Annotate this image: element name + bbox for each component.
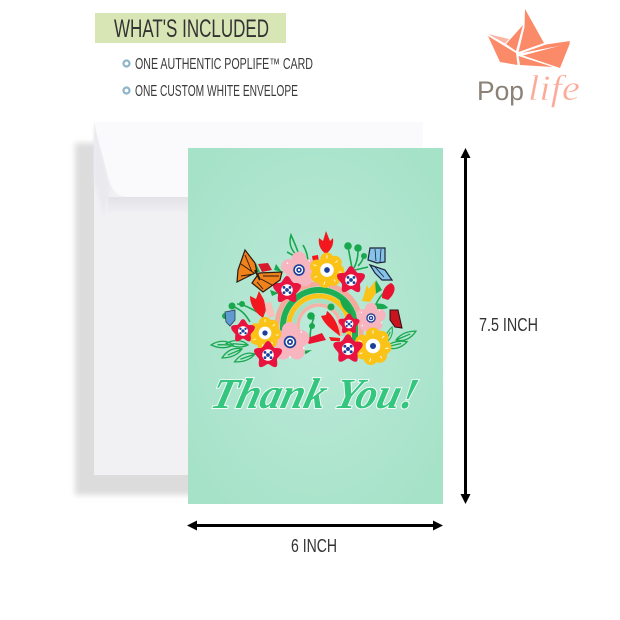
heading: what's included: WHAT'S INCLUDED	[114, 15, 269, 43]
logo wordmark: life: life	[528, 68, 580, 108]
logo: poplife	[477, 9, 580, 108]
list item: card: ONE AUTHENTIC POPLIFE™ CARD	[135, 56, 313, 73]
panel: heading banner	[95, 13, 286, 43]
arrow: height	[460, 148, 470, 504]
yellow tulip	[362, 281, 376, 302]
list item: envelope	[124, 83, 298, 100]
butterfly: small blue	[225, 310, 235, 326]
thank you lettering: Thank You!	[207, 371, 423, 418]
leaves right	[381, 327, 417, 349]
greenery	[232, 235, 389, 342]
label: 7.5 inch: 7.5 INCH	[479, 315, 538, 335]
list item: card	[124, 56, 313, 73]
butterfly: blue	[368, 248, 392, 280]
list item: envelope: ONE CUSTOM WHITE ENVELOPE	[135, 83, 298, 100]
card	[188, 148, 443, 504]
rainbow	[277, 284, 361, 347]
logo wordmark: Pop: Pop	[477, 76, 524, 106]
envelope flap	[94, 122, 423, 197]
envelope	[94, 122, 423, 475]
flowers	[231, 252, 391, 367]
label: 6 inch: 6 INCH	[291, 536, 337, 556]
red tulips	[250, 231, 395, 344]
arrow: width	[187, 520, 443, 530]
leaves left	[211, 337, 256, 362]
butterfly: red	[390, 310, 402, 328]
envelope shadow	[75, 143, 193, 495]
small pink butterfly	[265, 302, 275, 318]
butterfly: monarch	[237, 250, 282, 292]
